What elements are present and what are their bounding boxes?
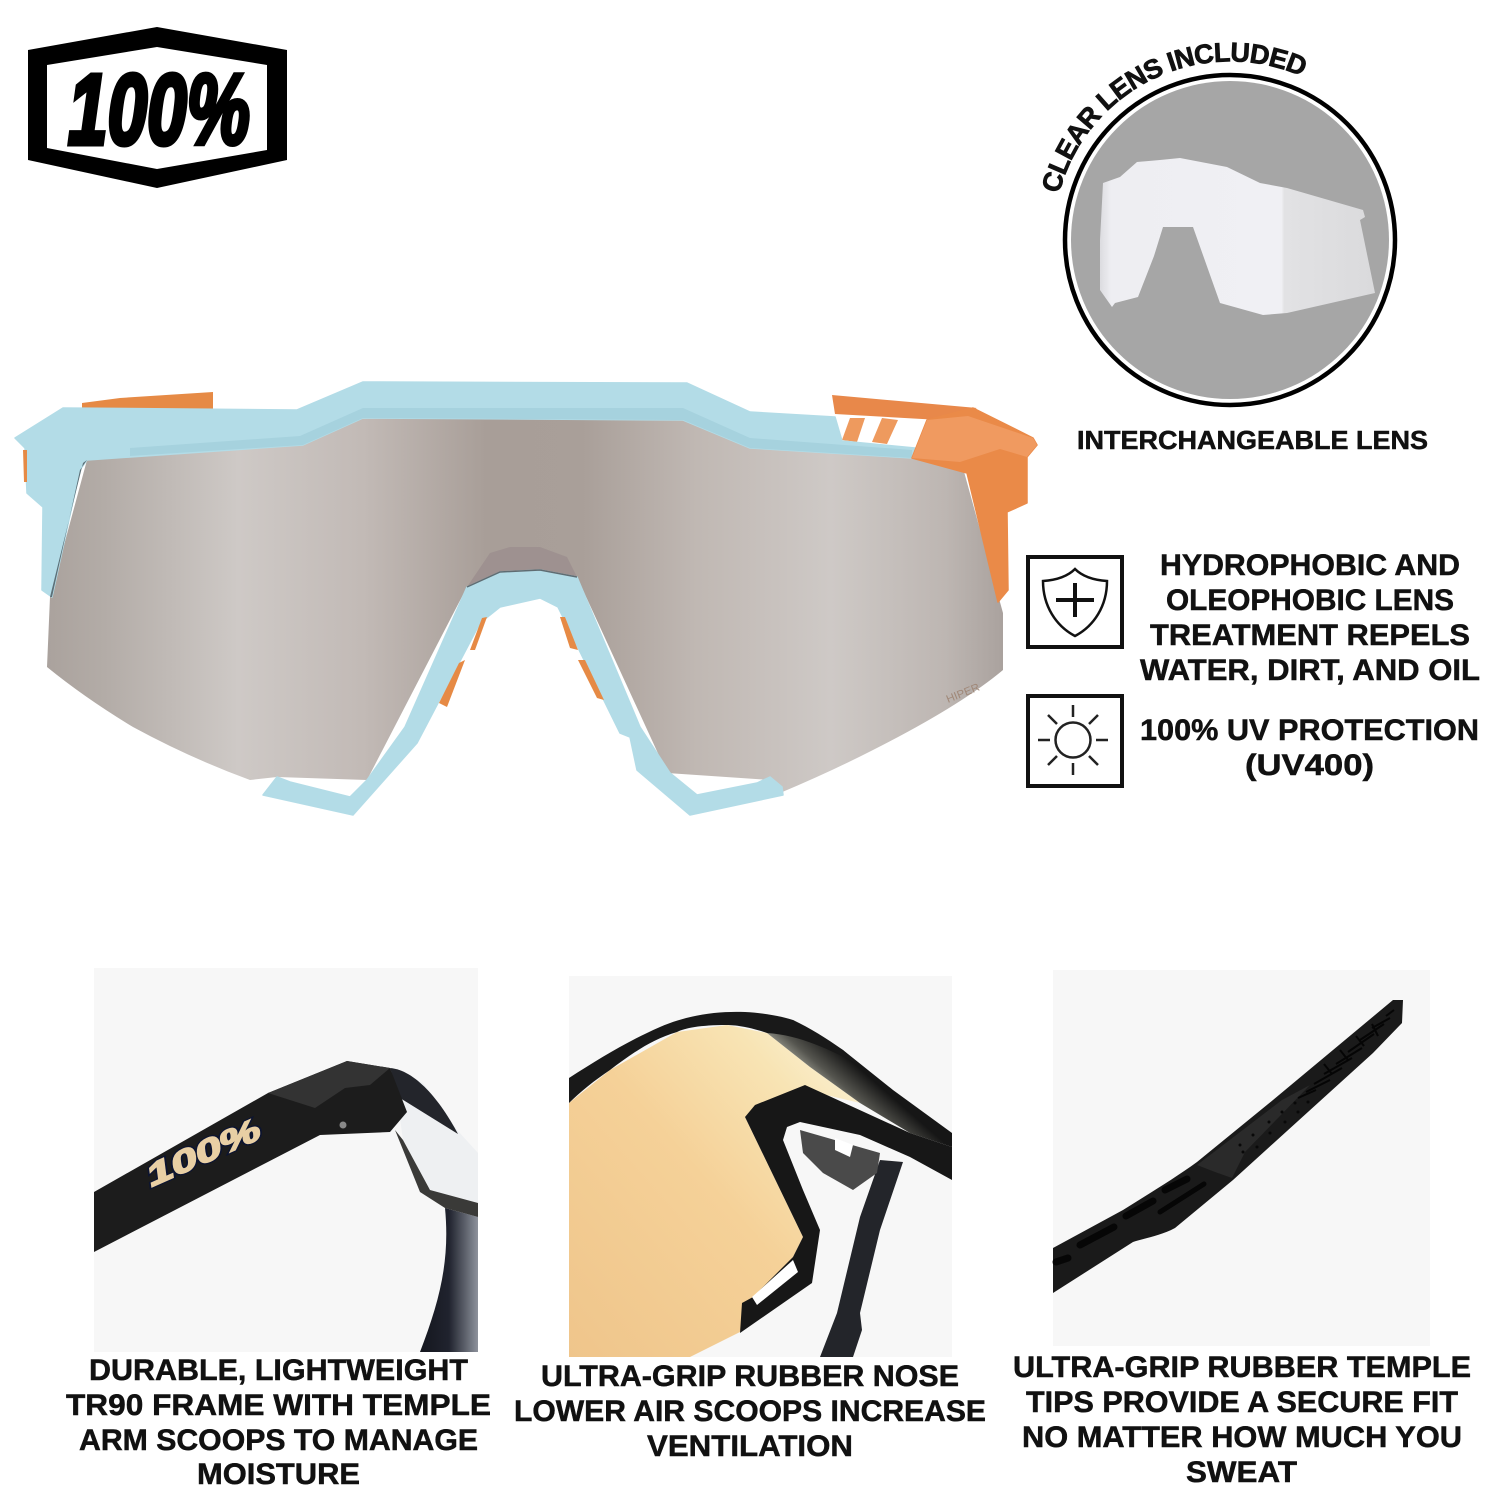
caption: temple tips: SWEAT — [1186, 1456, 1297, 1489]
arm logo: 100% — [140, 1112, 266, 1193]
orange stripes — [842, 418, 898, 444]
slots — [1056, 1179, 1204, 1262]
temple arm upper — [767, 1020, 952, 1147]
icon: shield — [1028, 557, 1122, 647]
clear lens shape — [1100, 158, 1375, 315]
frame — [15, 382, 915, 597]
curved heading: CLEAR LENS INCLUDED — [1042, 42, 1306, 192]
lens band — [393, 1068, 478, 1203]
left side orange sliver — [23, 450, 27, 482]
caption: temple tips: ULTRA-GRIP RUBBER TEMPLE — [1013, 1351, 1471, 1384]
lower arm — [820, 1160, 903, 1357]
caption: temple arm: ARM SCOOPS TO MANAGE — [79, 1424, 478, 1457]
caption: temple tips: TIPS PROVIDE A SECURE FIT — [1026, 1386, 1458, 1419]
text: HYDROPHOBIC AND — [1160, 549, 1460, 582]
rubber tip — [1053, 1000, 1403, 1293]
panel: temple arm photo — [94, 968, 478, 1352]
icon: sun — [1028, 696, 1122, 786]
text: TREATMENT REPELS — [1150, 619, 1470, 652]
nose wrap — [740, 1085, 952, 1333]
logo: 100% badge — [28, 27, 287, 188]
arm logo: 100% — [140, 1112, 266, 1193]
dots — [1238, 1100, 1310, 1154]
sunglasses front view — [15, 382, 1037, 815]
arm — [94, 1061, 407, 1252]
panel: nose photo — [569, 976, 952, 1357]
peach lens — [569, 1025, 860, 1357]
hex tread — [1298, 1010, 1394, 1098]
vent opening — [752, 1260, 798, 1305]
hinge screw — [340, 1122, 346, 1128]
text — [1140, 714, 1479, 782]
caption: nose: ULTRA-GRIP RUBBER NOSE — [541, 1360, 959, 1393]
lower frame — [420, 1208, 478, 1352]
panel: temple tip photo — [1053, 970, 1430, 1346]
nose frame — [263, 570, 783, 815]
text — [1140, 549, 1480, 687]
orange right tab — [832, 395, 977, 420]
caption: temple arm — [66, 1354, 491, 1491]
text: 100% UV PROTECTION — [1140, 714, 1479, 747]
caption: temple arm: MOISTURE — [197, 1458, 360, 1491]
text: (UV400) — [1245, 749, 1374, 782]
frame lower shading — [130, 408, 912, 458]
orange left tab — [82, 392, 213, 416]
nose pad hole — [835, 1138, 853, 1157]
nose frame edge — [467, 570, 577, 587]
hinge lower edge — [395, 1130, 478, 1217]
caption: nose: LOWER AIR SCOOPS INCREASE — [514, 1395, 986, 1428]
caption: temple arm: TR90 FRAME WITH TEMPLE — [66, 1389, 491, 1422]
left temple shade — [50, 460, 87, 597]
hinge highlight — [268, 1061, 390, 1108]
interchangeable lens caption: INTERCHANGEABLE LENS — [1077, 425, 1428, 455]
nose pads — [439, 617, 604, 707]
orange right temple — [912, 408, 1037, 602]
text: OLEOPHOBIC LENS — [1166, 584, 1454, 617]
hiper mark: HIPER — [945, 682, 982, 706]
lens — [47, 418, 1003, 793]
orange temple highlight — [912, 416, 1037, 462]
caption: temple tips — [1013, 1351, 1471, 1489]
caption: nose: VENTILATION — [647, 1430, 853, 1463]
caption: nose — [514, 1360, 986, 1463]
feature: uv protection — [1028, 696, 1479, 786]
circle background — [1065, 75, 1395, 405]
lens dark top edge — [390, 1068, 458, 1134]
arm logo — [140, 1112, 266, 1193]
caption: temple tips: NO MATTER HOW MUCH YOU — [1022, 1421, 1462, 1454]
feature: lens treatment — [1028, 549, 1480, 687]
clear lens badge — [1042, 42, 1398, 408]
lens bridge shadow — [467, 547, 577, 587]
caption: temple arm: DURABLE, LIGHTWEIGHT — [89, 1354, 468, 1387]
text: WATER, DIRT, AND OIL — [1140, 654, 1480, 687]
top frame — [569, 1012, 860, 1103]
rubber nose pad — [800, 1130, 880, 1190]
logo: 100% badge: 100% — [68, 54, 250, 166]
lighter dotted section — [1197, 1085, 1310, 1178]
